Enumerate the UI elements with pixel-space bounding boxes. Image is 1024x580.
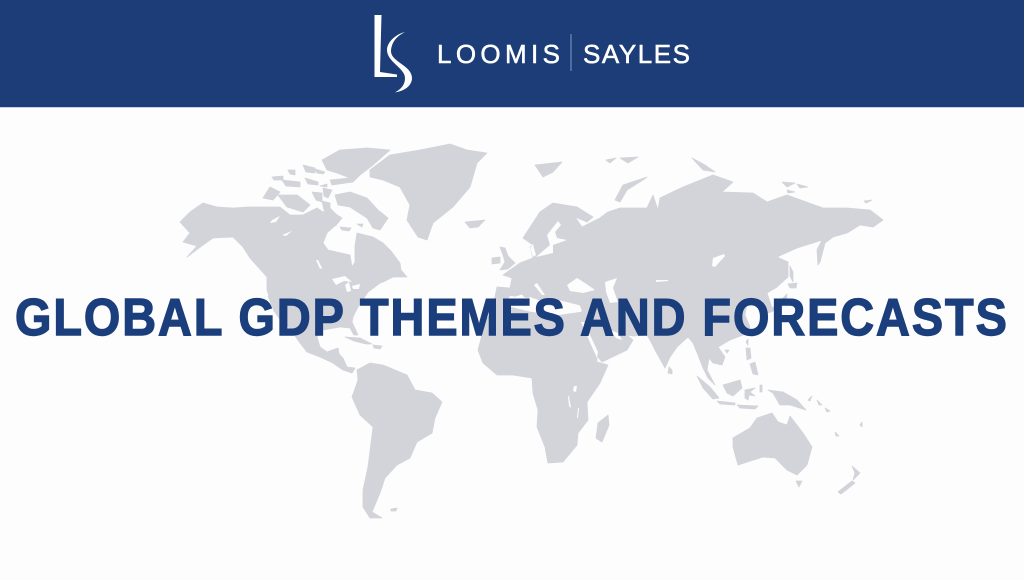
map: North and Central America <box>180 203 407 373</box>
map: inland seas <box>270 216 725 418</box>
map: Svalbard <box>535 162 562 177</box>
map: Arctic Russia islands <box>606 157 872 203</box>
map: New Zealand <box>838 466 860 494</box>
Black Sea <box>567 278 595 293</box>
logo: Loomis Sayles <box>374 15 690 92</box>
Lake Baikal <box>712 254 725 267</box>
map: Cuba and Caribbean <box>345 337 382 349</box>
African lakes <box>568 386 579 418</box>
map: Arctic islands <box>322 148 390 185</box>
map: New Guinea <box>768 390 806 410</box>
Caspian Sea <box>605 278 618 303</box>
map: Taiwan and Hainan <box>725 339 748 353</box>
map: Australia <box>733 413 812 475</box>
Red Sea and gulfs <box>581 322 598 358</box>
Great Lakes <box>332 276 360 292</box>
map: South America <box>352 363 442 518</box>
logo divider <box>570 34 572 71</box>
header band <box>0 0 1024 107</box>
Denmark channel <box>530 244 536 257</box>
map: Tasmania <box>796 481 802 487</box>
map: Greenland <box>370 144 487 240</box>
map: Britain and Ireland <box>492 247 515 270</box>
map: Sri Lanka <box>668 367 672 374</box>
map: Novaya Zemlya <box>615 177 647 202</box>
world map <box>180 144 883 518</box>
map: Japan and Sakhalin <box>767 266 797 313</box>
logo mark: LS monogram <box>374 15 412 92</box>
title: GLOBAL GDP THEMES AND FORECASTS <box>15 289 1007 347</box>
Mediterranean <box>505 296 582 313</box>
map: Falkland Islands <box>391 508 397 511</box>
map: Africa <box>478 306 608 463</box>
map: Iceland <box>465 220 485 228</box>
map: Eurasia <box>490 175 883 385</box>
map: Baja California <box>268 296 288 326</box>
map: Indonesia and Philippines <box>723 380 742 396</box>
logo text: Sayles: SAYLES <box>583 39 690 69</box>
logo text: Loomis: LOOMIS <box>437 39 560 69</box>
Balkhash <box>656 280 668 282</box>
map: Madagascar <box>596 415 609 442</box>
Baltic <box>536 221 567 257</box>
